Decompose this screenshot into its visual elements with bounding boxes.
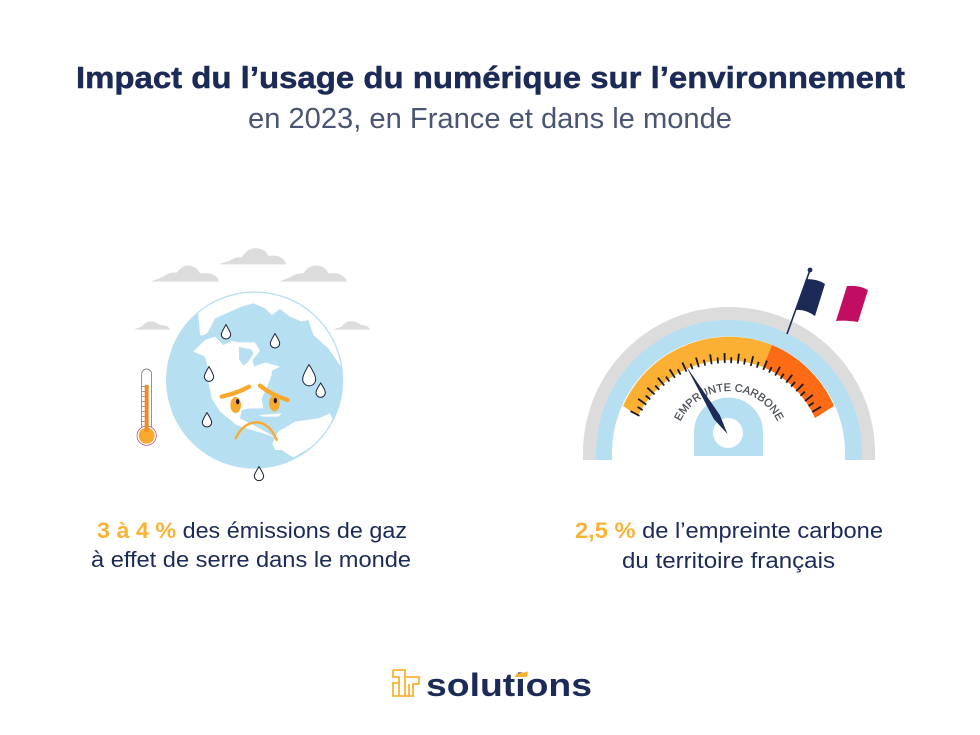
earth with land and face bbox=[166, 291, 344, 469]
logo mark bbox=[393, 670, 419, 696]
gauge outer grey arch bbox=[583, 307, 875, 460]
logo wordmark: solutions bbox=[426, 667, 592, 703]
caption: french footprint: du territoire français bbox=[622, 548, 835, 573]
gauge hub bbox=[694, 398, 763, 456]
logo bbox=[393, 667, 592, 703]
gauge ticks bbox=[635, 358, 819, 415]
gauge red segment bbox=[763, 345, 834, 418]
caption: world emissions: à effet de serre dans le monde bbox=[91, 547, 411, 572]
sad eyebrows bbox=[222, 386, 288, 400]
gauge curved label bbox=[675, 391, 783, 445]
sad mouth bbox=[236, 422, 277, 440]
caption: french footprint: 2,5 % de l’empreinte carbone bbox=[575, 518, 883, 543]
tear drops bbox=[202, 325, 325, 481]
illustration: sad globe bbox=[133, 248, 370, 481]
illustration: carbon footprint gauge: EMPRUNTE CARBONE bbox=[674, 383, 784, 422]
land masses bbox=[194, 292, 341, 458]
gauge light blue arch bbox=[596, 320, 862, 460]
gauge orange segment bbox=[623, 337, 772, 416]
caption: world emissions: 3 à 4 % des émissions de gaz bbox=[97, 518, 407, 543]
icon: thermometer bbox=[137, 369, 156, 445]
title: Impact du l’usage du numérique sur l’environnement bbox=[76, 60, 905, 95]
illustration: carbon footprint gauge bbox=[583, 268, 875, 460]
hudson bay bbox=[239, 347, 254, 366]
logo accent bbox=[515, 672, 528, 677]
gauge needle bbox=[686, 366, 728, 434]
subtitle: en 2023, en France et dans le monde bbox=[248, 103, 732, 135]
globe outline bbox=[167, 292, 343, 468]
clouds bbox=[133, 248, 370, 330]
caption: french footprint bbox=[575, 518, 883, 573]
caption: world emissions bbox=[91, 518, 411, 572]
icon: french flag bbox=[787, 268, 868, 334]
eyes bbox=[230, 395, 280, 413]
